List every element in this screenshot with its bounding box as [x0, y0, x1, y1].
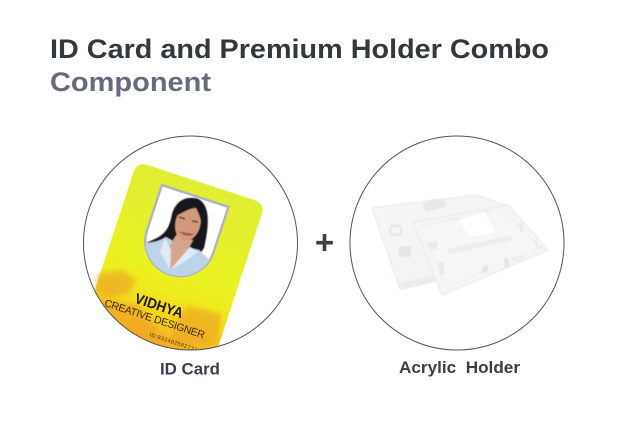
label: Acrylic Holder: [399, 359, 521, 377]
title: ID Card and Premium Holder Combo: [50, 34, 549, 64]
card name text: ID:932482582731: [148, 332, 198, 354]
card name text: CREATIVE DESIGNER: [103, 297, 207, 342]
card name text: VIDHYA: [133, 291, 185, 322]
holder image: [372, 195, 548, 295]
title: [50, 34, 549, 97]
title: Component: [50, 67, 211, 97]
ID card image: [93, 164, 263, 350]
person photo: [146, 197, 210, 276]
back plate: [372, 195, 508, 290]
photo window: [144, 184, 230, 278]
label: ID Card: [160, 360, 220, 378]
panel: ID card: [76, 136, 297, 389]
panel: acrylic holder: [350, 136, 564, 377]
front plate: [413, 205, 548, 295]
circle outline: [84, 136, 298, 350]
circle outline: [350, 136, 564, 350]
card map pattern: [96, 270, 222, 345]
plus sign: +: [315, 224, 334, 260]
